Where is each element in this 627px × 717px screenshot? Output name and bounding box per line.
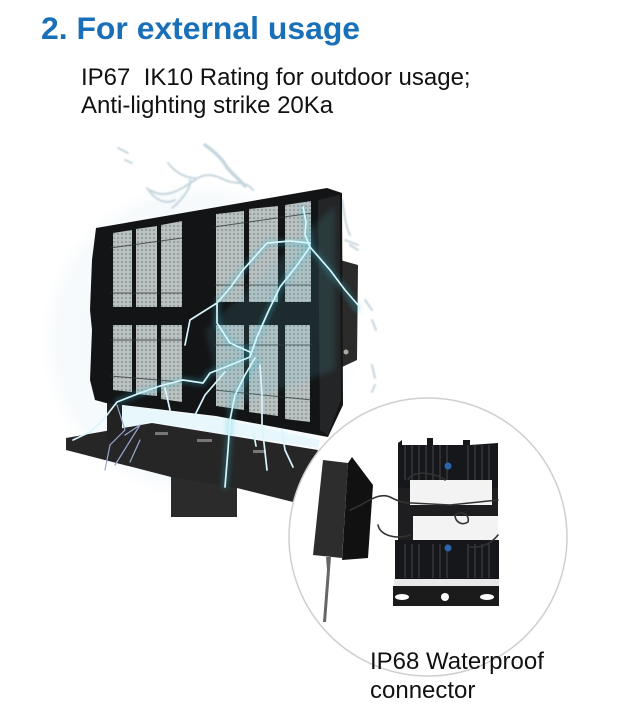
panel grid lines: [110, 213, 312, 400]
cyan tint over right panels: [205, 205, 335, 410]
LED panels: [113, 201, 311, 422]
lightning bolts: [73, 207, 358, 487]
inset circle: IP68 connector detail: [289, 398, 567, 676]
inset caption: connector: [370, 677, 475, 704]
description text: IP67 IK10 Rating for outdoor usage;: [81, 64, 471, 91]
inset circle background: [289, 398, 567, 676]
heat sink: [395, 438, 499, 582]
power drivers: [410, 480, 498, 540]
wiring: [350, 473, 498, 547]
floodlight illustration with water and lightning: [40, 145, 376, 517]
post: [171, 470, 237, 517]
inset caption: IP68 Waterproof: [370, 648, 544, 675]
inset caption: [370, 648, 544, 704]
junction box: [313, 457, 373, 622]
title: 2. For external usage: [41, 10, 360, 46]
upright arm: [107, 403, 122, 441]
lightning glow: [117, 207, 358, 487]
base plate: [66, 423, 318, 502]
cable gland: [323, 557, 331, 622]
white reflection beneath lamp: [122, 405, 320, 448]
mounting bracket: [340, 260, 358, 368]
bottom mounting bar: [393, 579, 499, 606]
description text: Anti-lighting strike 20Ka: [81, 92, 334, 119]
water splash: [118, 145, 376, 392]
violet lower bolts: [105, 405, 140, 470]
description text: [81, 64, 471, 119]
background halo: [40, 180, 360, 500]
lamp frame: [90, 188, 343, 437]
